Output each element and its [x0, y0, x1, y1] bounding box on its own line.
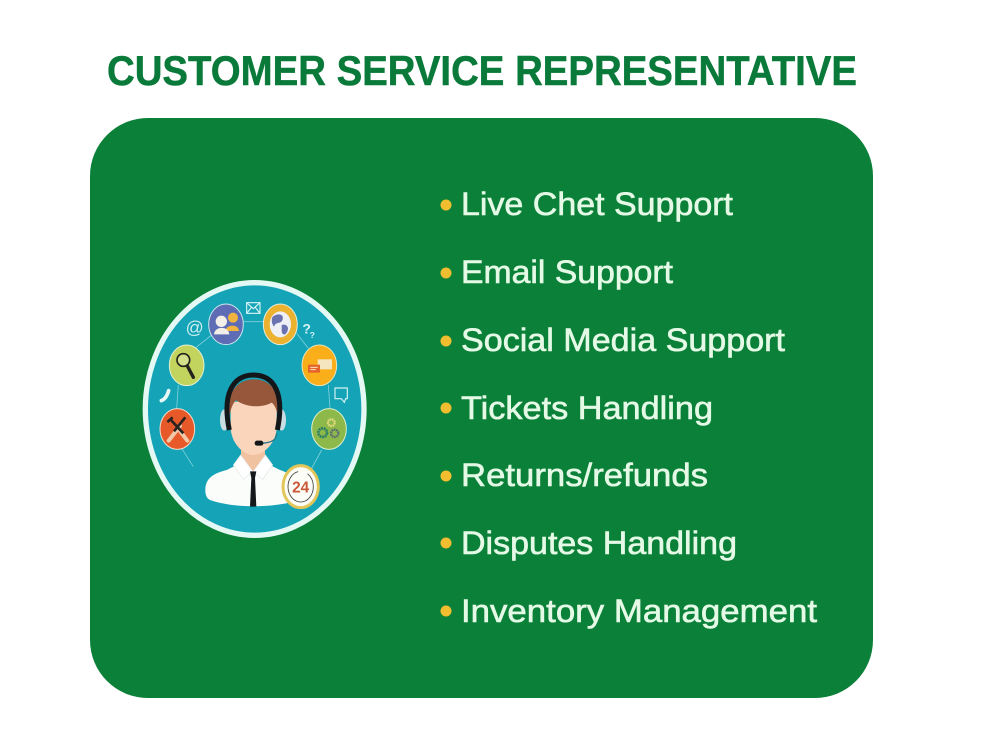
shirt	[205, 463, 300, 506]
icon: at sign: @	[186, 317, 204, 337]
icon: people	[209, 304, 243, 345]
icon: magnifier	[169, 345, 204, 386]
title: CUSTOMER SERVICE REPRESENTATIVE	[107, 47, 857, 94]
tie	[250, 471, 256, 507]
panel: green card	[90, 118, 873, 698]
icon: envelope	[247, 303, 260, 313]
icon: question marks: ?	[310, 330, 315, 340]
icon: speech bubble	[335, 388, 347, 402]
icon: chat messages	[302, 345, 337, 386]
icon: tools	[160, 409, 195, 449]
agent figure	[205, 375, 300, 507]
bullet item: Tickets Handling: Tickets Handling	[461, 390, 713, 426]
headset band	[227, 375, 280, 430]
connecting arc	[177, 322, 330, 468]
bullet item: Live Chet Support: Live Chet Support	[461, 186, 733, 222]
neck	[241, 443, 265, 472]
hair	[229, 379, 278, 417]
icon: gears	[312, 409, 346, 449]
icon: 24 hour clock: 24	[292, 480, 310, 497]
bullet item: Returns/refunds: Returns/refunds	[461, 457, 708, 493]
bullet item: Disputes Handling: Disputes Handling	[461, 525, 737, 561]
mic	[262, 433, 277, 443]
list: services	[440, 186, 817, 629]
ear cups	[220, 409, 229, 431]
bullet item: Email Support: Email Support	[461, 254, 673, 290]
icon: phone	[161, 391, 169, 401]
bullet item: Inventory Management: Inventory Management	[461, 593, 817, 629]
illustration: support agent badge	[145, 283, 364, 535]
icon: 24 hour clock	[283, 466, 318, 508]
face	[231, 402, 277, 455]
collar	[233, 455, 273, 479]
icon: question marks: ?	[302, 320, 311, 336]
icon: question marks	[302, 320, 315, 340]
icon: globe	[263, 304, 297, 345]
badge circle	[145, 283, 364, 535]
bullet item: Social Media Support: Social Media Support	[461, 322, 785, 358]
